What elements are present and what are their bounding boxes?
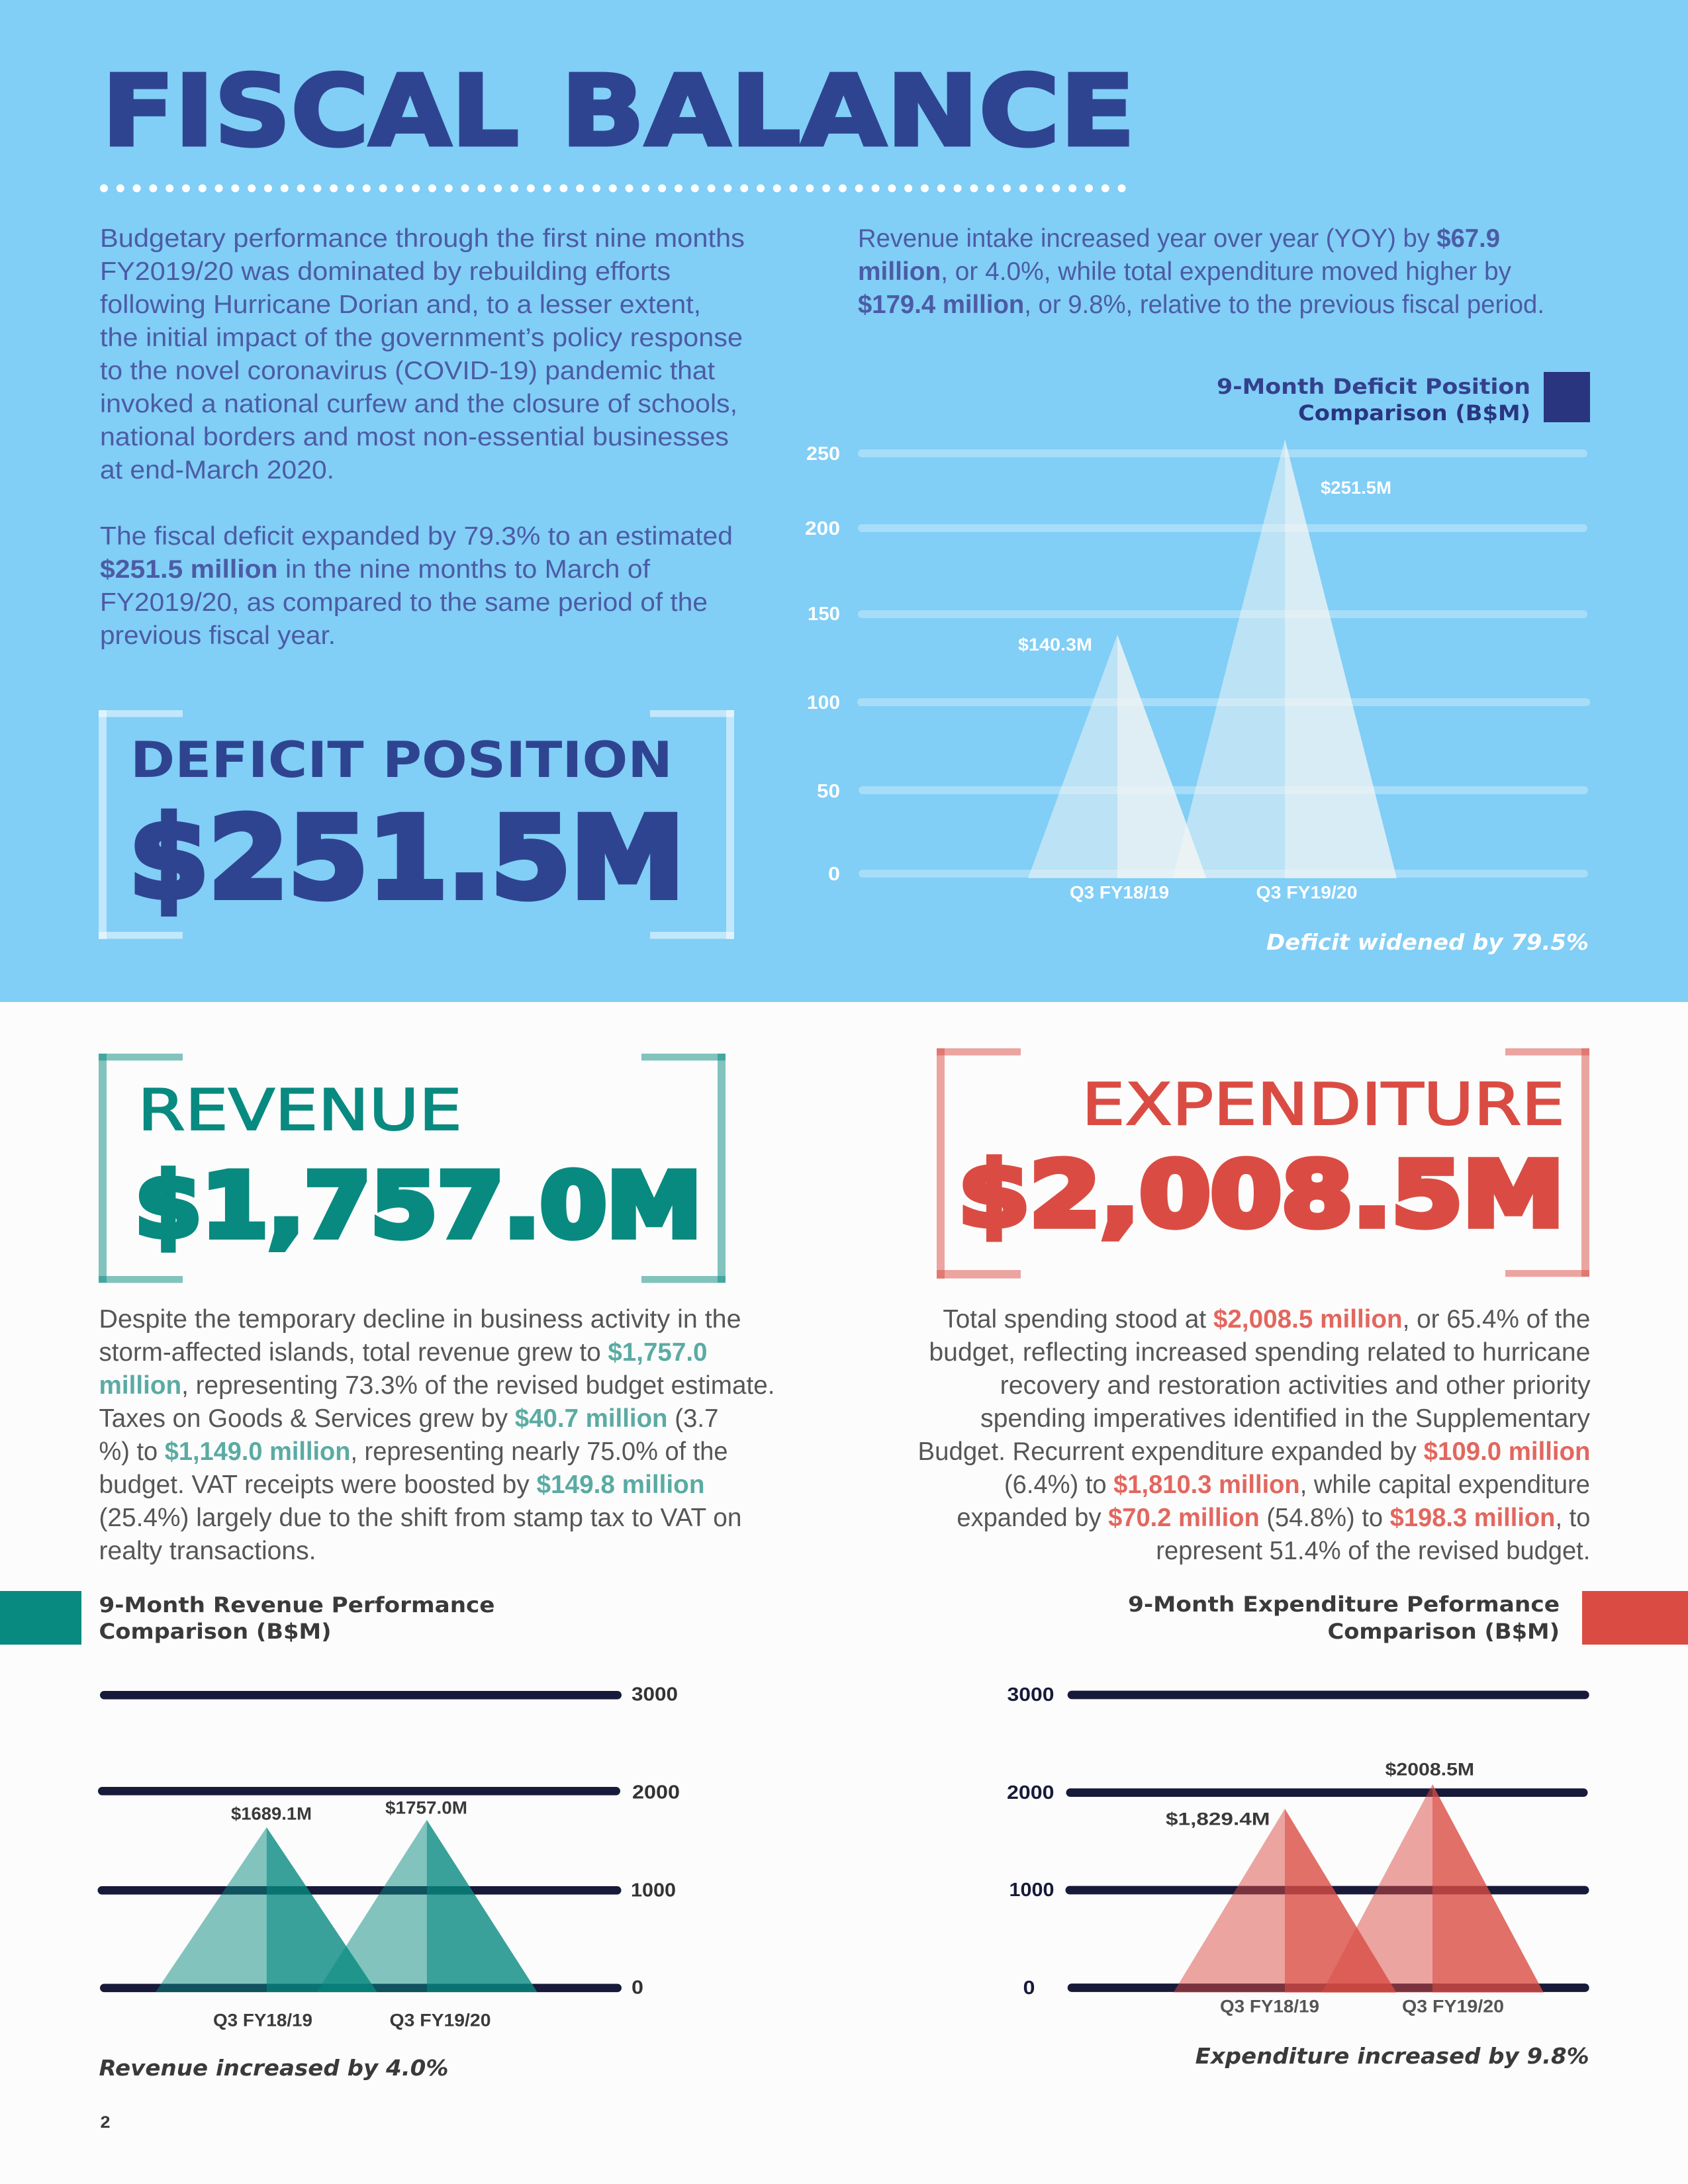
callout: deficit position: DEFICIT POSITION xyxy=(130,731,673,789)
text block: expenditure narrative: (6.4%) to $1,810.3 million, while capital expenditure xyxy=(1004,1471,1590,1499)
y axis labels: 3000 xyxy=(632,1684,678,1705)
y axis labels xyxy=(631,1684,680,1999)
text block: budgetary performance: previous fiscal year. xyxy=(100,621,336,650)
callout: expenditure: $2,008.5M xyxy=(959,1143,1564,1247)
y axis labels: 0 xyxy=(632,1978,643,1999)
text block: budgetary performance: to the novel coronavirus (COVID-19) pandemic that xyxy=(100,357,715,385)
text block: revenue narrative: Taxes on Goods & Services grew by $40.7 million (3.7 xyxy=(99,1404,719,1433)
panel: fiscal balance header xyxy=(0,0,1688,1002)
value labels and axis labels xyxy=(213,1797,491,2030)
y axis labels xyxy=(805,443,840,885)
chart title xyxy=(1217,372,1590,426)
text block: budgetary performance: The fiscal deficit expanded by 79.3% to an estimated xyxy=(100,522,733,551)
text block: expenditure narrative: spending imperatives identified in the Supplementary xyxy=(980,1404,1590,1433)
y axis labels: 50 xyxy=(817,781,840,802)
value labels and axis labels: $251.5M xyxy=(1321,478,1391,498)
callout: deficit position: $251.5M xyxy=(129,793,684,923)
text block: revenue intake: million, or 4.0%, while total expenditure moved higher by xyxy=(858,257,1511,286)
value labels and axis labels xyxy=(1166,1759,1504,2016)
callout: expenditure xyxy=(937,1048,1589,1279)
title: FISCAL xyxy=(102,54,519,168)
chart title: 9-Month Revenue Performance xyxy=(99,1592,495,1617)
text block: revenue narrative: million, representing 73.3% of the revised budget estimate. xyxy=(99,1371,774,1400)
text block: budgetary performance: the initial impact of the government’s policy response xyxy=(100,324,743,352)
triangle: Q3 FY19/20 deficit xyxy=(1173,439,1397,878)
text block: expenditure narrative: recovery and restoration activities and other priority xyxy=(1000,1371,1591,1400)
y axis labels xyxy=(1007,1684,1054,1999)
y axis labels: 0 xyxy=(1023,1978,1035,1999)
text block: revenue narrative: Despite the temporary decline in business activity in the xyxy=(99,1305,741,1334)
triangle: Q3 FY18/19 expenditure xyxy=(1174,1809,1396,1993)
triangle: Q3 FY19/20 expenditure xyxy=(1322,1784,1544,1993)
text block: budgetary performance: following Hurricane Dorian and, to a lesser extent, xyxy=(100,291,701,319)
value labels and axis labels: Q3 FY19/20 xyxy=(1256,883,1357,903)
text block: budgetary performance: national borders and most non-essential businesses xyxy=(100,423,729,451)
y axis labels: 150 xyxy=(808,604,840,625)
value labels and axis labels: Q3 FY18/19 xyxy=(1220,1996,1319,2016)
y axis labels: 200 xyxy=(805,518,840,539)
chart: deficit position comparison xyxy=(805,372,1590,955)
text block: budgetary performance: $251.5 million in the nine months to March of xyxy=(100,555,650,584)
callout: revenue: REVENUE xyxy=(138,1077,462,1144)
value labels and axis labels xyxy=(1018,478,1391,903)
y axis labels: 0 xyxy=(828,864,840,885)
text block: revenue narrative: budget. VAT receipts were boosted by $149.8 million xyxy=(99,1471,704,1499)
value labels and axis labels: $140.3M xyxy=(1018,635,1092,655)
y axis labels: 2000 xyxy=(632,1782,680,1803)
value labels and axis labels: $2008.5M xyxy=(1385,1759,1474,1779)
text block: revenue intake xyxy=(858,224,1544,319)
chart caption: Deficit widened by 79.5% xyxy=(1266,929,1589,955)
value labels and axis labels: Q3 FY19/20 xyxy=(1402,1996,1504,2016)
value labels and axis labels: $1689.1M xyxy=(231,1804,312,1824)
title: BALANCE xyxy=(561,54,1135,168)
text block: revenue narrative: (25.4%) largely due to the shift from stamp tax to VAT on xyxy=(99,1504,741,1532)
text block: budgetary performance: Budgetary performance through the first nine months xyxy=(100,224,745,253)
text block: budgetary performance: FY2019/20, as compared to the same period of the xyxy=(100,588,708,617)
y axis labels: 3000 xyxy=(1008,1684,1054,1706)
value labels and axis labels: Q3 FY19/20 xyxy=(389,2011,491,2030)
chart title: 9-Month Deficit Position xyxy=(1217,374,1530,399)
text block: budgetary performance: at end-March 2020. xyxy=(100,456,334,484)
text block: expenditure narrative: Total spending stood at $2,008.5 million, or 65.4% of the xyxy=(943,1305,1590,1334)
text block: revenue narrative xyxy=(99,1305,774,1565)
text block: expenditure narrative: represent 51.4% of the revised budget. xyxy=(1156,1537,1590,1565)
callout: expenditure: EXPENDITURE xyxy=(1082,1071,1565,1138)
text block: revenue intake: Revenue intake increased year over year (YOY) by $67.9 xyxy=(858,224,1500,253)
text block: expenditure narrative xyxy=(917,1305,1591,1565)
triangle: Q3 FY19/20 revenue xyxy=(316,1820,538,1992)
text block: expenditure narrative: budget, reflecting increased spending related to hurricane xyxy=(929,1338,1590,1367)
triangle: Q3 FY18/19 revenue xyxy=(156,1827,377,1992)
chart title: Comparison (B$M) xyxy=(1298,400,1530,426)
triangle: Q3 FY18/19 deficit xyxy=(1028,635,1206,878)
chart: revenue performance comparison xyxy=(0,1591,680,2081)
y axis labels: 250 xyxy=(806,443,840,465)
chart title: Comparison (B$M) xyxy=(1328,1619,1560,1644)
value labels and axis labels: Q3 FY18/19 xyxy=(1070,883,1169,903)
page number: 2 xyxy=(101,2113,110,2132)
text block: budgetary performance: FY2019/20 was dominated by rebuilding efforts xyxy=(100,257,671,286)
text block: expenditure narrative: expanded by $70.2 million (54.8%) to $198.3 million, to xyxy=(957,1504,1590,1532)
text block: revenue narrative: realty transactions. xyxy=(99,1537,316,1565)
title xyxy=(102,54,1135,168)
text block: revenue narrative: storm-affected islands, total revenue grew to $1,757.0 xyxy=(99,1338,707,1367)
value labels and axis labels: Q3 FY18/19 xyxy=(213,2011,312,2030)
value labels and axis labels: $1,829.4M xyxy=(1166,1809,1270,1829)
value labels and axis labels: $1757.0M xyxy=(385,1797,467,1817)
chart title xyxy=(1128,1591,1688,1645)
callout: revenue: $1,757.0M xyxy=(135,1154,702,1257)
chart title xyxy=(0,1591,495,1645)
callout: deficit position xyxy=(99,710,734,939)
chart caption: Revenue increased by 4.0% xyxy=(99,2055,449,2081)
chart: expenditure performance comparison xyxy=(1007,1591,1688,2069)
y axis labels: 1000 xyxy=(631,1880,676,1901)
y axis labels: 2000 xyxy=(1007,1782,1054,1803)
text block: budgetary performance xyxy=(100,224,745,650)
y axis labels: 1000 xyxy=(1009,1880,1054,1901)
text block: expenditure narrative: Budget. Recurrent expenditure expanded by $109.0 million xyxy=(917,1437,1590,1466)
chart title: Comparison (B$M) xyxy=(99,1619,331,1644)
panel: revenue xyxy=(0,1054,774,2081)
panel: expenditure xyxy=(917,1048,1688,2069)
text block: revenue intake: $179.4 million, or 9.8%, relative to the previous fiscal period. xyxy=(858,291,1544,319)
chart title: 9-Month Expenditure Peformance xyxy=(1128,1592,1560,1617)
callout: revenue xyxy=(99,1054,726,1283)
chart caption: Expenditure increased by 9.8% xyxy=(1196,2043,1589,2069)
y axis labels: 100 xyxy=(807,692,840,713)
text block: budgetary performance: invoked a national curfew and the closure of schools, xyxy=(100,390,737,418)
text block: revenue narrative: %) to $1,149.0 million, representing nearly 75.0% of the xyxy=(99,1437,728,1466)
